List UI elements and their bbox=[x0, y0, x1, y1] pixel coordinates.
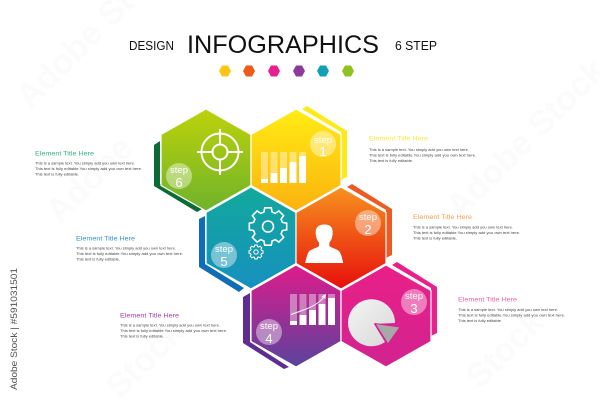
text block: step 6: Element Title Here bbox=[35, 150, 94, 158]
text block: step 1: This text is fully editable. bbox=[369, 158, 413, 163]
step 4 badge bbox=[256, 319, 282, 346]
step 5 badge bbox=[211, 242, 237, 269]
text block: step 2: This text is fully editable. bbox=[413, 236, 457, 240]
text block: step 2: This is a sample text. You simply add you own text here. bbox=[413, 224, 513, 230]
watermark: Stock bbox=[459, 303, 551, 396]
text block: step 4 bbox=[120, 312, 227, 338]
step 1 badge: step bbox=[314, 135, 332, 146]
stock id caption: Adobe Stock | #591031501 bbox=[9, 268, 20, 390]
step 2 badge: 2 bbox=[364, 222, 372, 237]
step 6 badge: step bbox=[170, 165, 188, 176]
step 6 badge bbox=[166, 163, 192, 190]
text block: step 2 bbox=[413, 214, 520, 240]
text block: step 2: Element Title Here bbox=[413, 214, 472, 221]
title bbox=[129, 31, 437, 59]
step 4 hexagon bbox=[243, 265, 341, 369]
text block: step 4: This is a sample text. You simply add you own text here. bbox=[120, 322, 220, 328]
text block: step 1: Element Title Here bbox=[369, 136, 428, 142]
step 4 badge: 4 bbox=[265, 331, 273, 346]
text block: step 6 bbox=[35, 150, 142, 176]
text block: step 6: This is a sample text. You simply add you own text here. bbox=[35, 160, 135, 166]
step 3 badge: 3 bbox=[410, 301, 418, 316]
icon: bar chart bbox=[261, 152, 306, 183]
step 5 badge: step bbox=[215, 244, 233, 255]
text block: step 6: This text is fully editable.You simply add you own text here. bbox=[35, 166, 142, 171]
text block: step 4: Element Title Here bbox=[120, 312, 179, 320]
title: DESIGN bbox=[129, 39, 174, 53]
text block: step 5: Element Title Here bbox=[76, 236, 135, 242]
text block: step 5: This text is fully editable. bbox=[76, 256, 120, 262]
icon: small gear bbox=[249, 245, 263, 259]
text block: step 3: This is a sample text. You simply add you own text here. bbox=[458, 307, 558, 312]
step 3 badge: step bbox=[405, 291, 423, 302]
step 6 badge: 6 bbox=[175, 175, 183, 190]
text block: step 3: Element Title Here bbox=[458, 296, 517, 304]
title: 6 STEP bbox=[395, 39, 437, 53]
text block: step 1: This text is fully editable.You simply add you own text here. bbox=[369, 152, 476, 158]
text block: step 5: This text is fully editable.You simply add you own text here. bbox=[76, 251, 183, 256]
text block: step 1 bbox=[369, 136, 476, 163]
step 3 hexagon bbox=[341, 262, 437, 367]
step 3 badge bbox=[401, 289, 427, 316]
step 5 hexagon bbox=[199, 187, 296, 292]
icon: target bbox=[197, 129, 243, 175]
icon: large gear bbox=[249, 208, 287, 245]
step 1 badge bbox=[310, 131, 336, 159]
text block: step 1: This is a sample text. You simply add you own text here. bbox=[369, 147, 469, 152]
text block: step 6: This text is fully editable. bbox=[35, 172, 79, 176]
text block: step 2: This text is fully editable.You simply add you own text here. bbox=[413, 230, 520, 235]
text block: step 3: This text is fully editable. bbox=[458, 318, 502, 323]
step 2 hexagon bbox=[296, 184, 392, 289]
step 4 badge: step bbox=[260, 321, 278, 332]
text block: step 5 bbox=[76, 236, 183, 262]
icon: person bbox=[305, 224, 343, 263]
text block: step 5: This is a sample text. You simply add you own text here. bbox=[76, 246, 176, 250]
step 2 badge: step bbox=[359, 212, 377, 223]
text block: step 3 bbox=[458, 296, 565, 323]
watermark: Adobe bbox=[39, 129, 140, 231]
color key hexagons bbox=[219, 66, 354, 76]
step 1 hexagon bbox=[251, 106, 347, 211]
icon: growth bar chart bbox=[290, 294, 335, 325]
text block: step 4: This text is fully editable. bbox=[120, 334, 164, 338]
text block: step 3: This text is fully editable.You simply add you own text here. bbox=[458, 312, 565, 318]
icon: pie chart bbox=[348, 299, 400, 346]
step 2 badge bbox=[355, 210, 381, 237]
text block: step 4: This text is fully editable.You simply add you own text here. bbox=[120, 328, 227, 333]
step 5 badge: 5 bbox=[220, 254, 228, 269]
step 1 badge: 1 bbox=[319, 144, 327, 159]
step 6 hexagon bbox=[154, 109, 251, 212]
title: INFOGRAPHICS bbox=[187, 31, 379, 59]
